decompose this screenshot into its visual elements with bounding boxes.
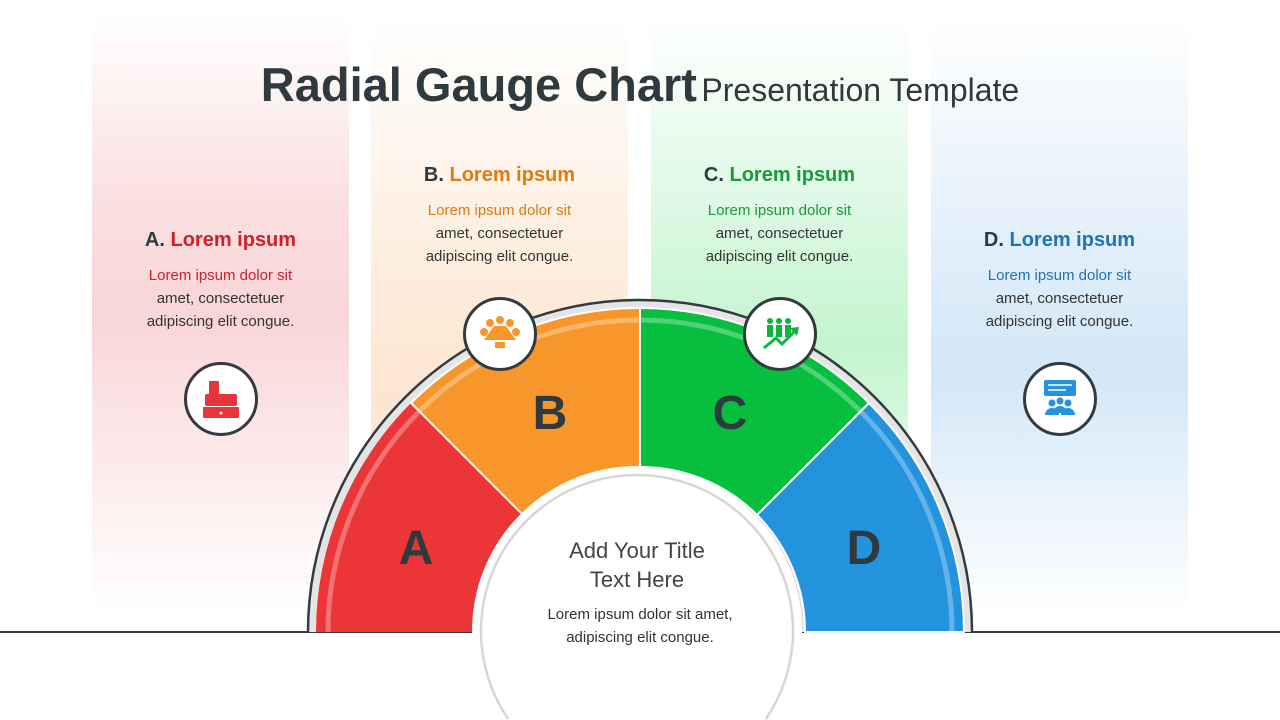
center text: Add Your Title (569, 538, 705, 563)
text block D: adipiscing elit congue. (986, 313, 1133, 330)
text block A: amet, consectetuer (157, 290, 284, 307)
text block D: Lorem ipsum dolor sit (988, 267, 1131, 284)
icon: meeting table B (463, 297, 537, 371)
segment letters: B (533, 387, 567, 440)
segment B (411, 308, 640, 515)
text block B (424, 164, 575, 265)
baseline (0, 631, 1280, 633)
text block B: Lorem ipsum dolor sit (428, 202, 571, 219)
text block C: Lorem ipsum dolor sit (708, 202, 851, 219)
text block A (145, 229, 296, 330)
panel background: B (371, 15, 628, 615)
text block D (984, 229, 1135, 330)
text block A: Lorem ipsum dolor sit (149, 267, 292, 284)
center text: Lorem ipsum dolor sit amet, (547, 606, 733, 623)
panel background: C (651, 15, 908, 615)
icon: team growth C (743, 297, 817, 371)
text block A: adipiscing elit congue. (147, 313, 294, 330)
center text: Text Here (590, 567, 684, 592)
text block D: D. Lorem ipsum (984, 229, 1135, 251)
center text: adipiscing elit congue. (566, 629, 714, 646)
icon: presentation audience D (1023, 362, 1097, 436)
center text (547, 538, 733, 646)
center circle (472, 466, 802, 719)
segment A (316, 403, 523, 632)
segment letters (399, 387, 881, 575)
segment letters: C (713, 387, 747, 440)
text block C: amet, consectetuer (716, 225, 843, 242)
title: Radial Gauge Chart Presentation Template (261, 58, 1019, 111)
text block D: amet, consectetuer (996, 290, 1123, 307)
text block B: amet, consectetuer (436, 225, 563, 242)
panel background: A (92, 15, 349, 615)
text block C (704, 164, 855, 265)
text block B: B. Lorem ipsum (424, 164, 575, 186)
text block B: adipiscing elit congue. (426, 248, 573, 265)
gauge outer ring (308, 300, 972, 632)
segment D (757, 403, 964, 632)
text block A: A. Lorem ipsum (145, 229, 296, 251)
text block C: C. Lorem ipsum (704, 164, 855, 186)
segment letters: D (847, 522, 881, 575)
segment letters: A (399, 522, 433, 575)
highlight arc (328, 320, 952, 632)
text block C: adipiscing elit congue. (706, 248, 853, 265)
panel background: D (931, 15, 1188, 615)
icon: cash register A (184, 362, 258, 436)
segment C (640, 308, 869, 515)
